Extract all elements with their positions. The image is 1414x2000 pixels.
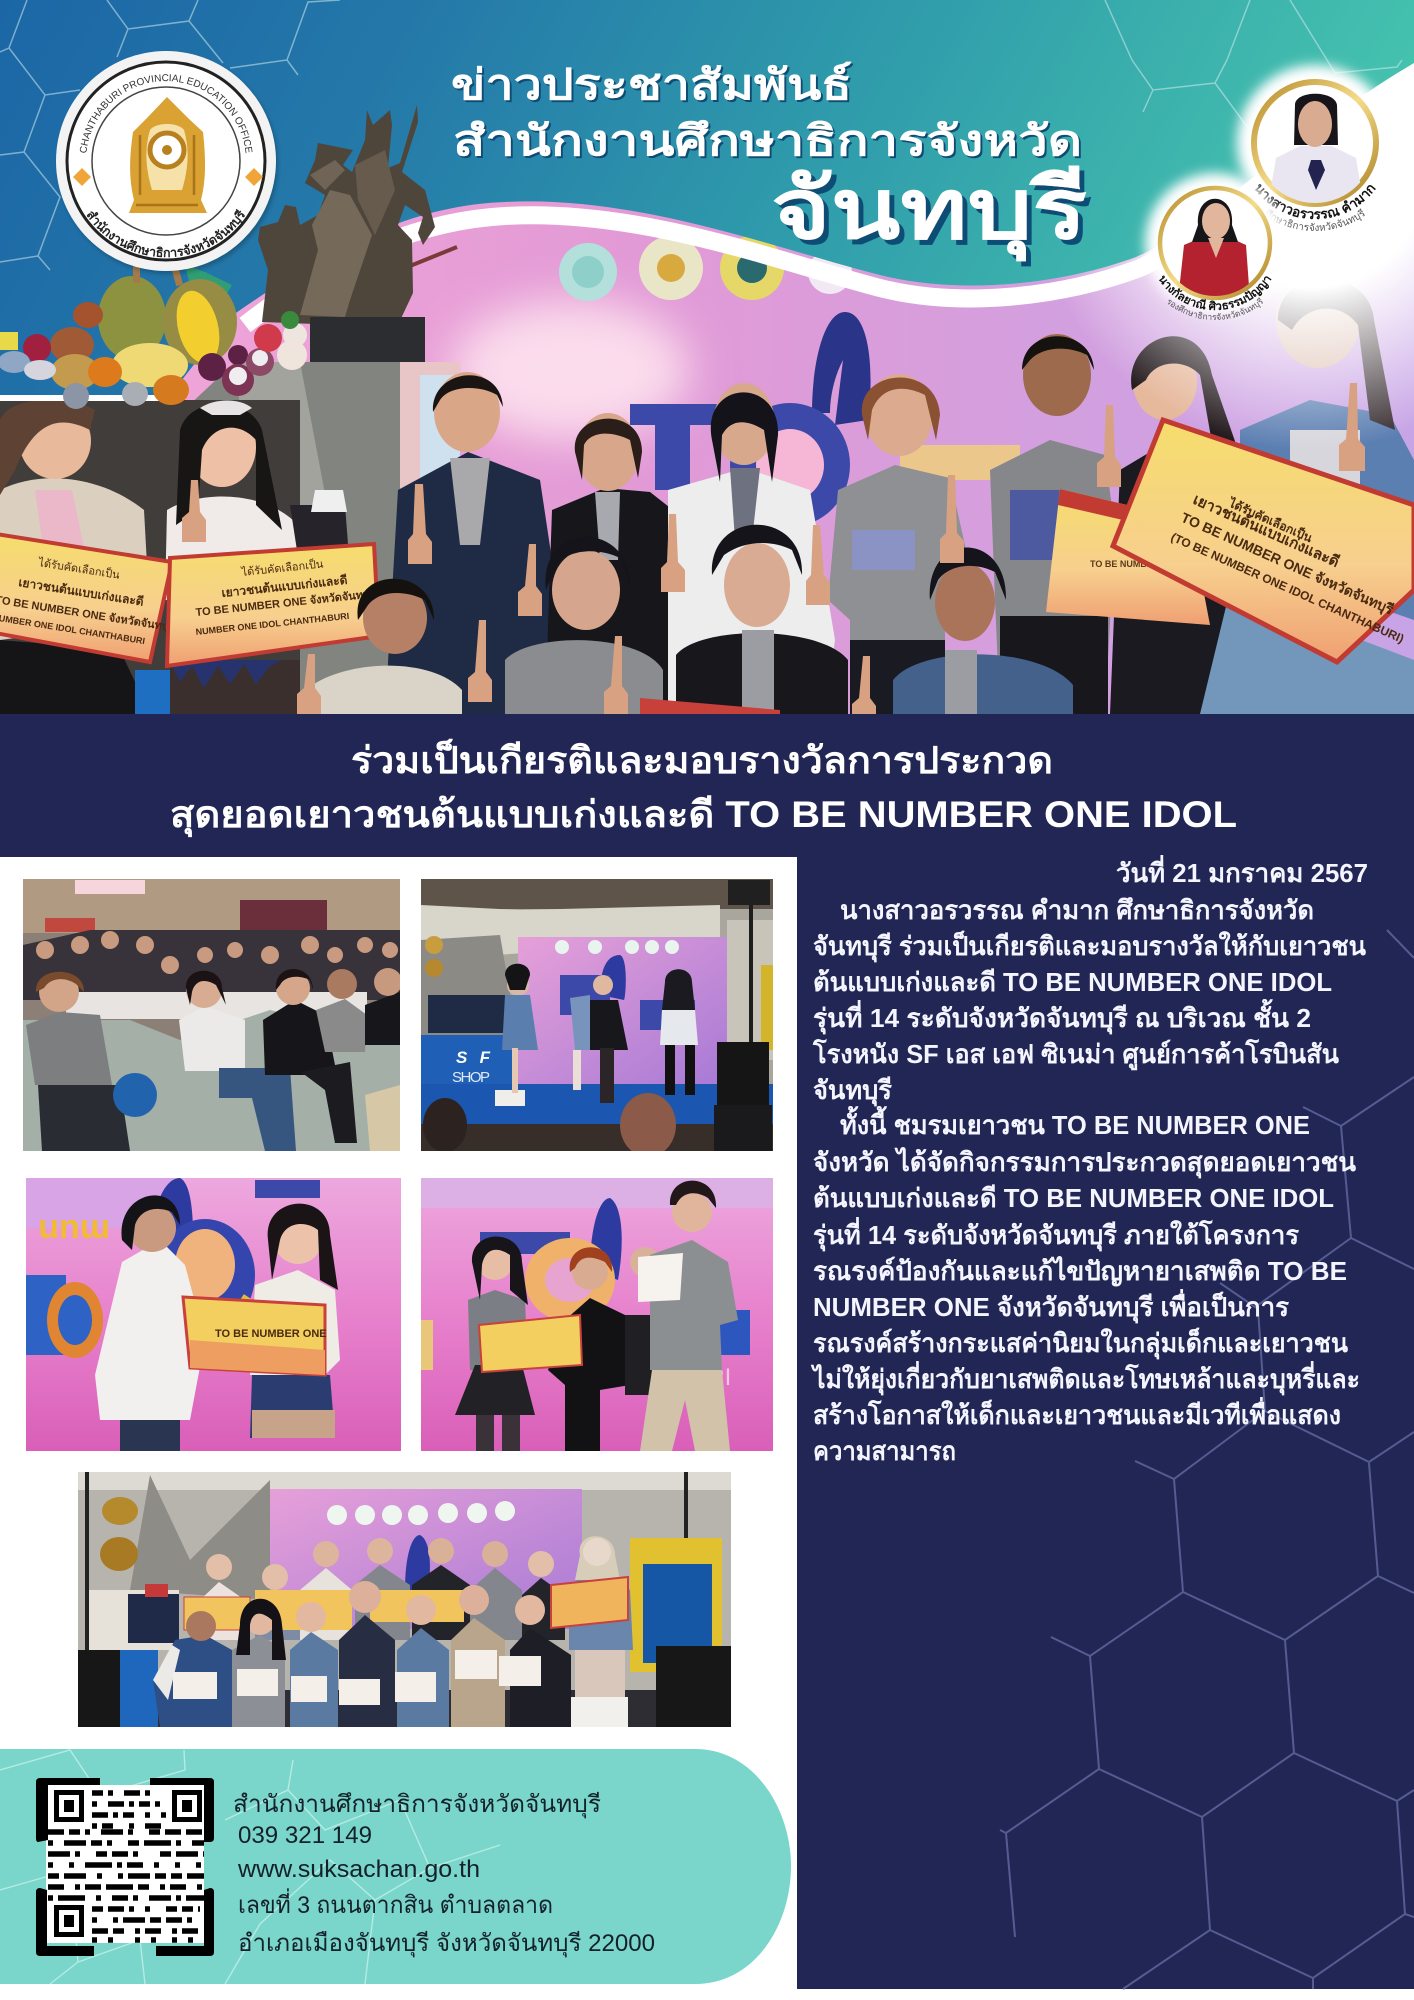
- girl in denim skirt: [250, 1270, 340, 1375]
- date: วันที่ 21 มกราคม 2567: [1116, 854, 1368, 888]
- blue bag: [113, 1073, 157, 1117]
- back row of youths: [200, 1536, 633, 1727]
- statue of King Taksin: [258, 105, 457, 362]
- large certificate banner right: [1113, 420, 1414, 662]
- merch: [428, 995, 513, 1033]
- photo: performers on stage: [421, 879, 773, 1157]
- left certificate banner 2: TO BE NUMBER ONE จังหวัดจันทบุรี: [195, 587, 377, 620]
- dancers: [495, 964, 698, 1106]
- white stripe under the fruit: [0, 395, 170, 401]
- audience heads: [423, 1098, 467, 1152]
- older woman in grey shirt: [828, 374, 975, 714]
- body text: [810, 854, 1368, 1466]
- backdrop TO logo: [160, 1178, 193, 1230]
- paragraph two: NUMBER ONE จังหวัดจันทบุรี เพื่อเป็นการ: [813, 1288, 1289, 1324]
- title line 1: ข่าวประชาสัมพันธ์: [451, 61, 852, 108]
- photo: group on stage: [78, 1472, 731, 1727]
- website: www.suksachan.go.th: [237, 1856, 480, 1883]
- paragraph one: ต้นแบบเก่งและดี TO BE NUMBER ONE IDOL: [813, 967, 1332, 997]
- official role 1: ศึกษาธิการจังหวัดจันทบุรี: [1267, 208, 1365, 231]
- large certificate banner right: TO BE NUMBER ONE จังหวัดจันทบุรี: [1178, 509, 1396, 619]
- longan and salak: [50, 327, 94, 363]
- photo: award presentation one: TO BE NUMBER ONE: [215, 1328, 327, 1340]
- crowd: [23, 930, 400, 1000]
- QR code: [36, 1778, 214, 1956]
- white fade at top right of photo: [1067, 200, 1414, 440]
- photo: audience on sofas: [23, 879, 402, 1151]
- paragraph two: รุ่นที่ 14 ระดับจังหวัดจันทบุรี ภายใต้โครงการ: [813, 1216, 1299, 1252]
- durian flesh piece: [112, 343, 188, 387]
- left certificate banner 2: NUMBER ONE IDOL CHANTHABURI: [195, 611, 350, 637]
- photo: award presentation two: URI: [690, 1364, 731, 1391]
- left girls: [0, 400, 350, 714]
- woman in black: [548, 1298, 630, 1451]
- paragraph two: รณรงค์ป้องกันและแก้ไขปัญหายาเสพติด TO BE: [813, 1255, 1347, 1287]
- stage floor: [421, 1084, 773, 1124]
- woman in black jacket: [548, 413, 668, 700]
- speaker: [717, 1042, 769, 1105]
- gold kiosk: [761, 965, 773, 1050]
- white area top right: [1280, 63, 1414, 210]
- woman in white coat: [668, 383, 835, 714]
- backdrop logo: [600, 955, 626, 1000]
- blue counter: [120, 1650, 158, 1727]
- girl behind: [625, 1315, 665, 1395]
- paragraph two: ไม่ให้ยุ่งเกี่ยวกับยาเสพติดและโทษเหล้าและบุหรี่และ: [810, 1360, 1360, 1396]
- grey wall at left of the stage: [194, 362, 400, 692]
- girl with ponytail: [1110, 336, 1236, 714]
- photo: performers on stage: SHOP: [452, 1069, 490, 1086]
- certificates: [173, 1650, 541, 1705]
- seated guests: [26, 1012, 112, 1085]
- front row: [153, 1581, 571, 1727]
- header title: [451, 61, 1087, 262]
- paragraph two: ทั้งนี้ ชมรมเยาวชน TO BE NUMBER ONE: [840, 1105, 1310, 1140]
- paragraph two: ความสามารถ: [813, 1436, 956, 1466]
- left certificate banner 2: [167, 544, 379, 666]
- left certificate banner 2: เยาวชนต้นแบบเก่งและดี: [221, 573, 348, 600]
- large certificate banner right: เยาวชนต้นแบบเก่งและดี: [1190, 491, 1342, 571]
- header hexagon lines: [0, 0, 1402, 270]
- white jacket woman: [95, 1240, 205, 1420]
- photo: performers on stage: SF: [456, 1048, 491, 1067]
- girl in denim jacket: [1200, 272, 1414, 714]
- paragraph one: โรงหนัง SF เอส เอฟ ซิเนม่า ศูนย์การค้าโรบินสัน: [812, 1038, 1339, 1071]
- diamonds: [73, 168, 263, 186]
- paragraph two: จังหวัด ได้จัดกิจกรรมการประกวดสุดยอดเยาวชน: [813, 1146, 1356, 1179]
- sponsor dots: [555, 940, 679, 954]
- emblem gold: [129, 97, 207, 213]
- small certificate banner right: TO BE NUMBER ONE: [1090, 559, 1181, 569]
- paragraph two: [810, 1105, 1360, 1466]
- boy with certificate: [650, 1240, 738, 1370]
- paragraph two: ต้นแบบเก่งและดี TO BE NUMBER ONE IDOL: [813, 1183, 1334, 1213]
- mangosteen: [198, 353, 226, 381]
- front row boys: [306, 525, 1073, 714]
- official portrait 1: [1228, 56, 1380, 231]
- official name 1: นางสาวอรวรรณ คำมาก: [1255, 184, 1376, 220]
- girl: [468, 1290, 528, 1370]
- headline line 1: ร่วมเป็นเกียรติและมอบรางวัลการประกวด: [351, 737, 1053, 781]
- backdrop TO logo: [405, 1535, 430, 1590]
- durian right with yellow flesh: [163, 279, 237, 365]
- left certificate banner 1: เยาวชนต้นแบบเก่งและดี: [18, 575, 145, 609]
- merch shelf: [89, 1590, 179, 1650]
- logo text thai: สำนักงานศึกษาธิการจังหวัดจันทบุรี: [86, 208, 245, 258]
- durian left: [98, 276, 166, 360]
- address line 1: เลขที่ 3 ถนนตากสิน ตำบลตลาด: [238, 1888, 553, 1919]
- official name 2: นางกัลยาณี ศิวธรรมปัญญา: [1159, 276, 1272, 310]
- paragraph one: จันทบุรี ร่วมเป็นเกียรติและมอบรางวัลให้กับเยาวชน: [813, 930, 1366, 963]
- official role 2: รองศึกษาธิการจังหวัดจันทบุรี: [1168, 297, 1263, 320]
- raised index fingers: [182, 383, 1365, 714]
- header banner with wave: [0, 0, 1414, 401]
- title line 3: จันทบุรี: [771, 162, 1087, 262]
- banner: [479, 1315, 582, 1372]
- phone: 039 321 149: [238, 1822, 372, 1849]
- paragraph two: สร้างโอกาสให้เด็กและเยาวชนและมีเวทีเพื่อแสดง: [813, 1396, 1341, 1430]
- photo: award presentation two: [421, 1178, 773, 1451]
- man in dark suit: [385, 372, 552, 714]
- photo: award presentation one: mun: [38, 1212, 110, 1250]
- navy text column: [797, 854, 1414, 1989]
- leaves: [185, 265, 232, 302]
- backdrop logo: [590, 1198, 622, 1280]
- paper certificate: [638, 1253, 683, 1302]
- TO idol backdrop logo: [630, 312, 1020, 527]
- paragraph one: นางสาวอรวรรณ คำมาก ศึกษาธิการจังหวัด: [840, 895, 1314, 925]
- backdrop logos row: [327, 1501, 515, 1525]
- left certificate banner 1: [0, 533, 176, 662]
- gold pom poms: [102, 1497, 138, 1525]
- title line 2: สำนักงานศึกษาธิการจังหวัด: [453, 117, 1082, 164]
- QR corner frame: [36, 1778, 214, 1956]
- certificate: [183, 1297, 325, 1375]
- orange gem: [88, 357, 122, 387]
- SF shop blue counter: [421, 1035, 518, 1085]
- rambutan and rose apple: [254, 324, 282, 352]
- paragraph one: รุ่นที่ 14 ระดับจังหวัดจันทบุรี ณ บริเวณ ชั้น 2: [813, 998, 1311, 1035]
- logo text english: CHANTHABURI PROVINCIAL EDUCATION OFFICE: [80, 74, 252, 154]
- paragraph one: [812, 895, 1366, 1107]
- stage light: [728, 880, 770, 905]
- statue pedestal: [310, 317, 425, 362]
- man in grey shirt: [990, 334, 1115, 714]
- light rays on backdrop: [450, 300, 690, 440]
- contact details: [233, 1791, 655, 1958]
- left certificate banner 2: ได้รับคัดเลือกเป็น: [240, 556, 324, 579]
- main group photo: [0, 200, 1414, 714]
- address line 2: อำเภอเมืองจันทบุรี จังหวัดจันทบุรี 22000: [238, 1930, 655, 1958]
- sponsor logos on backdrop: [559, 236, 852, 301]
- official portrait 2: [1136, 164, 1292, 320]
- navy title band: [0, 714, 1414, 857]
- row of banners: [184, 1577, 628, 1630]
- office name: สำนักงานศึกษาธิการจังหวัดจันทบุรี: [233, 1791, 601, 1819]
- kiosk: [630, 1538, 722, 1672]
- photo: award presentation one: [26, 1178, 401, 1451]
- headline line 2: สุดยอดเยาวชนต้นแบบเก่งและดี TO BE NUMBER ONE IDOL: [170, 794, 1237, 838]
- paragraph two: รณรงค์สร้างกระแสค่านิยมในกลุ่มเด็กและเยาวชน: [813, 1327, 1348, 1360]
- sofas: [23, 1010, 400, 1151]
- fruits and gems: [0, 255, 307, 409]
- stage floor behind performers: [158, 1690, 656, 1727]
- logo badge: [56, 51, 280, 276]
- small certificate banner right: [1046, 489, 1210, 625]
- large certificate banner right: ได้รับคัดเลือกเป็น: [1225, 494, 1315, 545]
- gems left: [23, 334, 51, 362]
- left certificate banner 1: ได้รับคัดเลือกเป็น: [37, 555, 121, 582]
- large certificate banner right: (TO BE NUMBER ONE IDOL CHANTHABURI): [1169, 530, 1406, 646]
- contact panel: [0, 1749, 791, 1984]
- speakers: [78, 1650, 120, 1727]
- paragraph one: จันทบุรี: [813, 1075, 892, 1107]
